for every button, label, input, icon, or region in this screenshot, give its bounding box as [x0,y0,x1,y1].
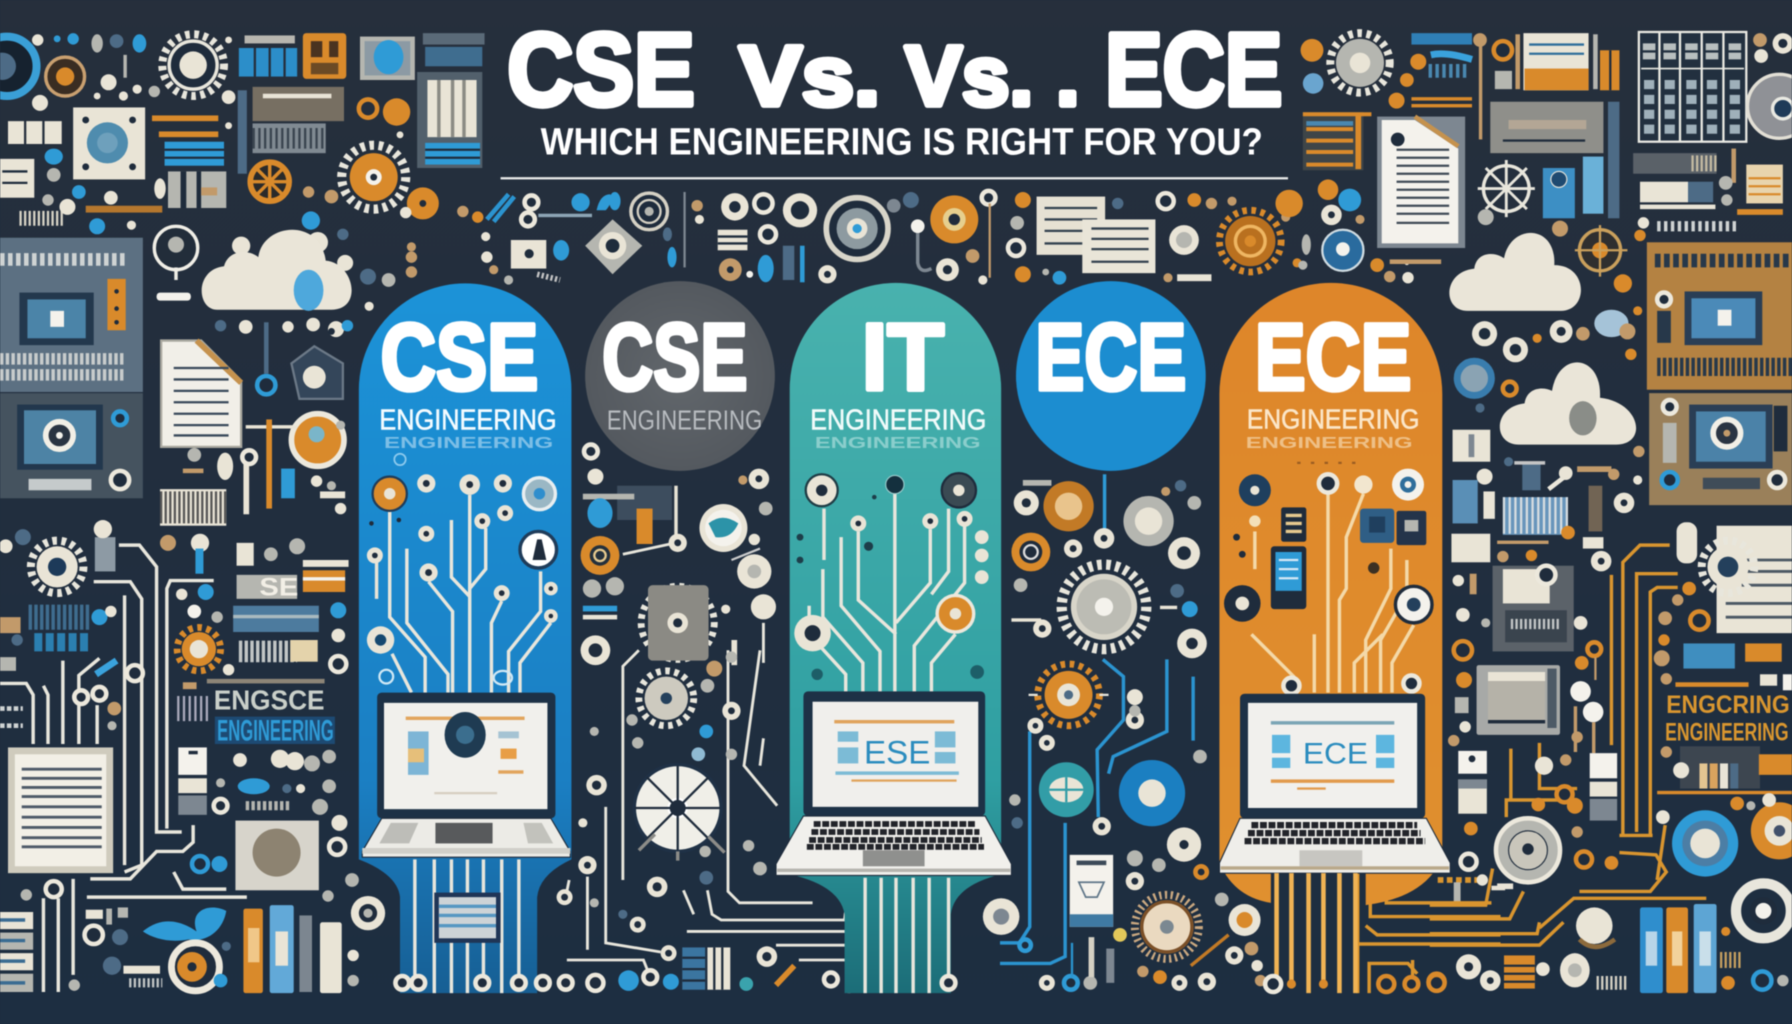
grey module blocks and label [237,573,298,601]
panel: grey CSE circle [585,281,775,471]
dark parts mid left [0,529,121,730]
small note [0,159,34,198]
faded reflection text: ENGINEERING [815,435,981,452]
column heading: CSE [602,305,747,411]
board: grey upper [0,238,143,392]
column heading: IT [862,305,944,411]
parts below document [160,419,346,526]
white pin [1677,522,1697,563]
white switch blocks right [1590,753,1617,821]
cream blocks [8,121,62,144]
board: tan lower [1649,393,1792,505]
orange circuit traces right [1430,545,1706,945]
bottom right shelf [1657,746,1792,794]
blue slashes [487,194,514,222]
engineering label: ENGINEERING [1247,404,1419,435]
middle column A components [557,445,861,993]
left boards [0,226,352,526]
vertical stick [674,486,678,537]
grid of cells [1639,32,1746,142]
top right components [1275,32,1792,311]
scattered small parts: top left [32,33,483,337]
panel: ECE column [1219,283,1450,993]
chip icon grey [1397,511,1426,545]
white spoked wheel [634,765,725,861]
stripes below ECE laptop [1277,873,1355,993]
chip icon blue [1360,509,1394,543]
circuit traces CSE [390,495,551,693]
nodes middle A [557,445,838,991]
heading: Vs. [739,28,880,123]
small parts: top centre [481,191,1302,285]
engineering label: ENGINEERING [810,405,986,437]
grey printer box [1493,566,1574,651]
icon: orange wheel 2 [250,162,289,201]
top central component row [481,191,1302,285]
framed blue panel [360,37,415,80]
nodes ECE [1224,463,1432,694]
blue target ring [1672,810,1738,877]
label: engineering text block: ENGINEERING [217,715,334,748]
laptop: IT [776,691,1011,875]
orange spiral gear [1219,210,1281,272]
right lower components [1438,526,1618,903]
orange bars [152,115,218,137]
trace rings [21,665,143,991]
icon: blue pin [257,322,275,394]
teal globe [1039,762,1094,817]
subtitle: WHICH ENGINEERING IS RIGHT FOR YOU? [541,120,1263,162]
blue tablet panels [1543,157,1603,218]
document with stripes [417,33,485,168]
laptop: CSE [362,693,570,857]
icon: white gear [162,34,224,96]
tablet icon [1271,546,1306,609]
middle column B components [983,474,1266,991]
rings at ECE base [1265,975,1445,992]
icon: dark pentagon [291,346,343,399]
component pin [94,520,115,571]
icon: cloud right top [1449,233,1581,311]
grey block [168,171,226,208]
icon: orange wheel [46,57,85,96]
stacked documents [1037,197,1155,273]
bar above label [207,679,325,683]
screen chip CSE [434,893,501,943]
cream square module [73,107,145,179]
engineering label: ENGINEERING [607,405,762,436]
board: dark lower [0,393,143,498]
blue stripes [165,142,224,166]
left lower circuit region [0,520,385,993]
traces from ECE base [1358,871,1501,993]
circle [1016,281,1206,471]
ring near CSE base [351,896,385,930]
heading: . [1056,28,1079,123]
column heading: CSE [381,305,538,411]
circuit traces ECE [1251,494,1414,693]
grey gear eye [585,219,642,274]
blue traces [1000,659,1193,963]
small parts: right mid [1453,430,1642,531]
circuit traces IT [809,494,965,693]
blue dial [1119,760,1185,826]
brown sun gear [1135,895,1199,959]
stripes below IT laptop [865,878,949,993]
icon: orange ring [291,414,344,466]
heading [507,12,1282,127]
cream orange doc [1515,33,1619,90]
heading: ECE [1105,12,1282,127]
gear top [1330,33,1390,93]
cream square [511,240,546,269]
cream chip [235,821,319,890]
blue gray stripes [233,606,319,662]
laptop screen text: ESE [864,734,930,770]
barcode strip [245,35,295,43]
big dial right [1747,74,1792,138]
orange dark ring [1011,533,1050,571]
ring at IT base [942,976,955,990]
chip icon dark [1281,507,1306,542]
document icon [161,341,241,447]
white rings cluster [1457,306,1645,457]
left upper component cluster [0,33,485,337]
white switch blocks left [1458,751,1487,814]
icon: helm wheel [1478,160,1535,217]
icon: orange gear [342,145,406,209]
scattered small parts: bottom left [86,534,359,987]
orange ring wheel [171,943,219,991]
icon: cloud right lower [1500,362,1636,445]
panel shape [359,283,571,993]
document: list [8,747,113,873]
icon: blue dial [0,37,37,96]
small parts: bottom right [1429,793,1789,991]
orange ring icon [1043,481,1094,531]
orange striped list [1303,112,1371,170]
orange dial [930,195,978,243]
white dial [1123,496,1174,546]
nodes CSE [367,454,558,685]
blue block and orange bar [583,486,672,544]
stacked drive units [0,912,33,992]
white sun gear [1062,565,1146,649]
icon: gold target [1575,225,1627,277]
cream segmented gear [1736,883,1791,938]
title rule [501,177,1288,179]
label: engineering text block: ENGSCE [214,685,325,716]
circuit traces [0,545,247,992]
right parts near label [1654,582,1792,690]
nodes IT [794,473,989,680]
ring teal world [699,504,747,552]
heading: Vs. [905,28,1033,123]
engineering label: ENGINEERING [379,405,557,437]
right boards and clouds [1358,242,1792,993]
books [243,905,342,993]
grey panel [1490,102,1619,218]
panel shape [1219,283,1442,905]
orange gear small [177,627,221,671]
grey texture panel [238,87,344,174]
right books [1640,904,1717,993]
label: small CSE: SE [259,573,298,601]
icon: blue ring lock [1322,230,1363,271]
icon: cloud [202,230,352,311]
label: engineering text block [214,685,335,748]
panel: IT column [776,283,1011,993]
icon: large cream ring [1496,818,1560,882]
gear with document right [1702,526,1792,633]
icon: ring target [154,226,198,301]
white ring large [1169,225,1199,255]
chip gear [641,585,714,661]
stripes below CSE laptop [415,859,519,993]
circuit traces middle A [566,543,861,993]
title [501,12,1288,179]
gear [31,541,83,593]
centre ring dial [826,198,888,259]
blue shapes [571,192,621,211]
board: orange tan upper [1647,242,1792,390]
laptop screen text: ECE [1303,737,1368,770]
blue stripes block [1503,497,1568,535]
orange gear lower [1029,664,1109,726]
heading: CSE [507,12,695,127]
right blocks [1633,149,1783,209]
orange ring [581,536,619,575]
orange parts [325,98,439,219]
scattered small parts: top right [1275,33,1792,293]
panel: CSE column [359,283,603,993]
faded reflection text: ENGINEERING [384,435,553,452]
orange segmented ring [1751,802,1792,859]
concentric ring [631,193,667,230]
column heading: ECE [1255,305,1411,411]
panel shape [790,283,1001,993]
gear lower [639,671,694,726]
ring pair [521,195,592,226]
blue bird shape [143,907,226,941]
orange tag [303,570,345,592]
laptop: ECE [1219,694,1450,873]
grey appliance [1477,665,1560,735]
panel: blue ECE circle [1016,281,1206,471]
small parts [983,480,1266,991]
white switch blocks [178,747,207,815]
orange block [303,33,346,79]
base rings CSE [395,975,603,991]
blue line [1103,474,1106,531]
blue chip blocks [239,48,297,77]
column heading: ECE [1035,305,1186,411]
barcode [19,212,63,225]
white document card [1070,855,1113,927]
document big [1377,117,1465,248]
circle [585,281,775,471]
faded reflection text: ENGINEERING [1246,435,1413,452]
